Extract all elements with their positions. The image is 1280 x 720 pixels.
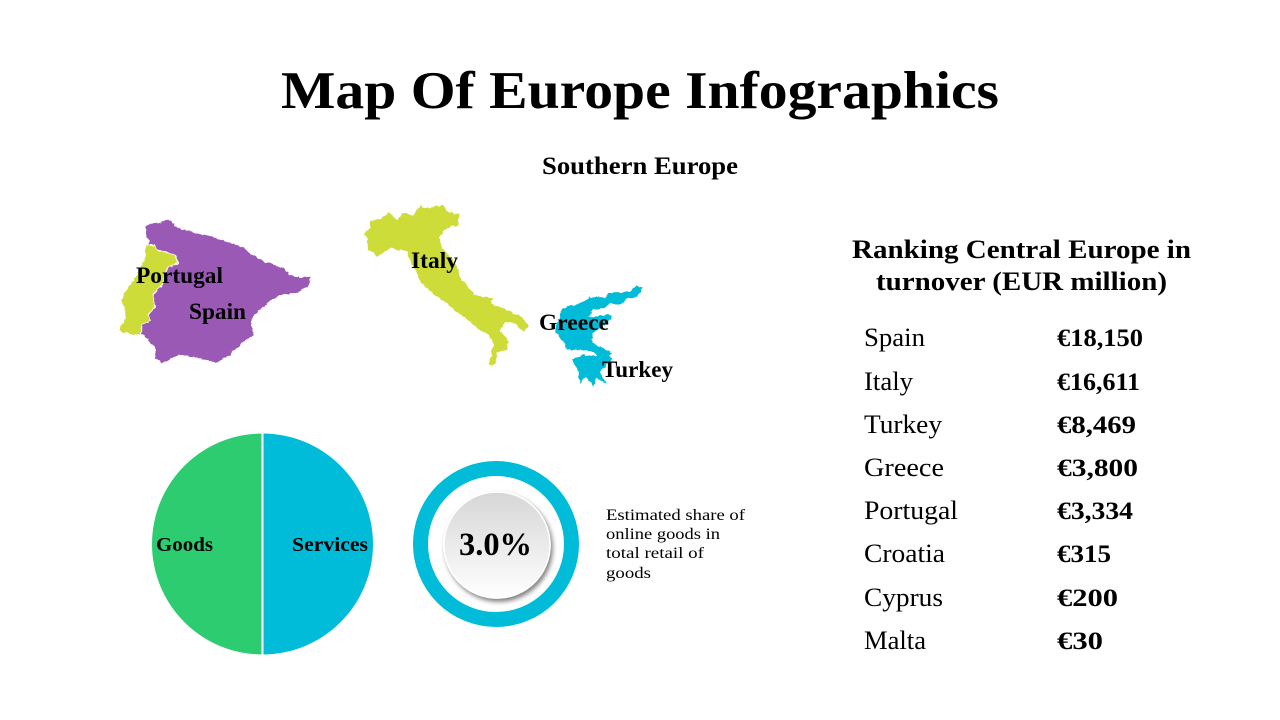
row: Portugal: Portugal [864,496,958,525]
row: Croatia: €315 [1057,541,1111,568]
ring caption: Estimated share of [606,507,746,524]
row: Cyprus [864,583,1118,612]
ring caption: online goods in [606,526,720,543]
row: Italy: €16,611 [1057,369,1140,396]
row: Greece: Greece [864,453,944,482]
row: Spain: €18,150 [1057,325,1143,352]
row: Malta: Malta [864,626,926,655]
pie chart: goods and services: Goods [156,534,213,556]
subtitle: Southern Europe: Southern Europe [542,153,738,180]
map labels: Turkey [602,357,673,382]
ring caption [606,507,746,582]
row: Italy: Italy [864,367,913,396]
ranking heading: turnover (EUR million) [876,266,1167,296]
map labels: Italy [411,248,459,273]
row: Spain [864,323,1143,352]
ranking table [864,323,1143,655]
row: Croatia: Croatia [864,539,945,568]
ranking heading: Ranking Central Europe in [852,234,1191,264]
row: Malta [864,626,1103,655]
map labels: Spain [189,299,246,324]
row: Cyprus: €200 [1057,585,1118,612]
row: Cyprus: Cyprus [864,583,943,612]
map: Turkey [572,352,612,386]
ring stat: 3.0% [420,468,572,620]
row: Italy [864,367,1140,396]
pie chart: goods and services: Services [292,534,368,556]
row: Spain: Spain [864,323,925,352]
row: Croatia [864,539,1111,568]
map: Greece [555,285,643,358]
map: Italy [363,205,528,365]
map: Portugal [118,245,178,336]
map labels: Portugal [136,263,223,288]
map labels [136,248,673,382]
row: Malta: €30 [1057,628,1103,655]
ring caption: total retail of [606,545,705,562]
row: Turkey: €8,469 [1057,412,1136,439]
row: Turkey [864,410,1136,439]
row: Turkey: Turkey [864,410,942,439]
row: Greece [864,453,1138,482]
row: Portugal: €3,334 [1057,498,1134,525]
ring stat: 3.0%: 3.0% [459,527,532,563]
ranking heading [852,234,1191,296]
ring caption: goods [606,565,651,582]
map: Spain [141,220,311,363]
row: Portugal [864,496,1134,525]
row: Greece: €3,800 [1057,455,1138,482]
map labels: Greece [539,310,609,335]
title: Map Of Europe Infographics [281,62,999,120]
pie chart: goods and services [152,433,373,655]
